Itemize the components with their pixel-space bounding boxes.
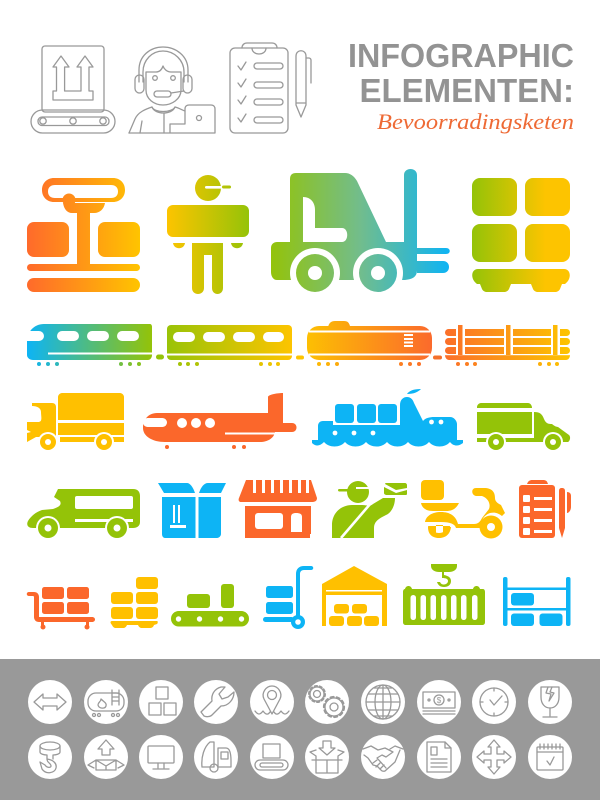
icon: calendar [528,735,572,779]
icon: orange trolley [27,587,95,630]
icon: courier with letter [332,481,407,538]
panel: grey footer [0,659,600,800]
icon: monitor [139,735,183,779]
icon: hand truck [263,566,313,629]
icon: log car [445,325,570,366]
icon: crane hook [28,735,72,779]
icon: clock [472,680,516,724]
icon: tank car [307,321,442,366]
icon: fuel tank [84,680,128,724]
icon: banknotes: $ [437,696,442,705]
icon: orange clipboard with pen [519,480,571,538]
icon: green van [27,489,140,540]
title [348,37,574,134]
icon: box with down arrow [305,735,349,779]
header outline icons [31,43,311,133]
icon: four-way arrows [472,735,516,779]
icon: box with up arrow [84,735,128,779]
icon: green conveyor belt [171,584,249,626]
icon: open parcel [158,483,226,538]
icon: globe [361,680,405,724]
icon: pallet with boxes [472,178,570,292]
icon: worker carrying box [167,175,249,294]
icon: checklist with pen [230,43,311,133]
icon: gears [305,680,349,724]
icon: delivery scooter [421,480,505,538]
subtitle: Bevoorradingsketen [377,109,574,134]
icon: fragile glass [528,680,572,724]
icon: shop [239,480,317,538]
icon: wrench [194,680,238,724]
heading line 2: ELEMENTEN: [360,72,574,109]
icon: passenger car green-yellow [165,325,304,366]
icon: yellow truck [27,393,124,452]
icon: warehouse [322,566,387,626]
icon: scale [27,178,140,292]
icon: green truck [477,403,570,452]
icon: box on conveyor [31,46,115,133]
icon: cargo ship [312,389,463,446]
icon: stacked boxes [139,680,183,724]
icon: customer service agent [129,47,215,133]
icon: truck front [194,735,238,779]
train row [20,321,570,366]
icon: airplane [143,393,296,449]
icon: map pin with waves [250,680,294,724]
icon: horizontal arrows [28,680,72,724]
icon: document [417,735,461,779]
icon: banknotes [417,680,461,724]
icon: forklift [271,169,450,298]
heading line 1: INFOGRAPHIC [348,37,574,74]
icon: handshake [361,735,405,779]
icon: yellow pallet stack [110,577,158,628]
icon: shipping container on hook [403,564,485,625]
icon: box on belt [250,735,294,779]
icon: storage rack [503,577,570,626]
icon: passenger car blue-green [20,324,164,366]
